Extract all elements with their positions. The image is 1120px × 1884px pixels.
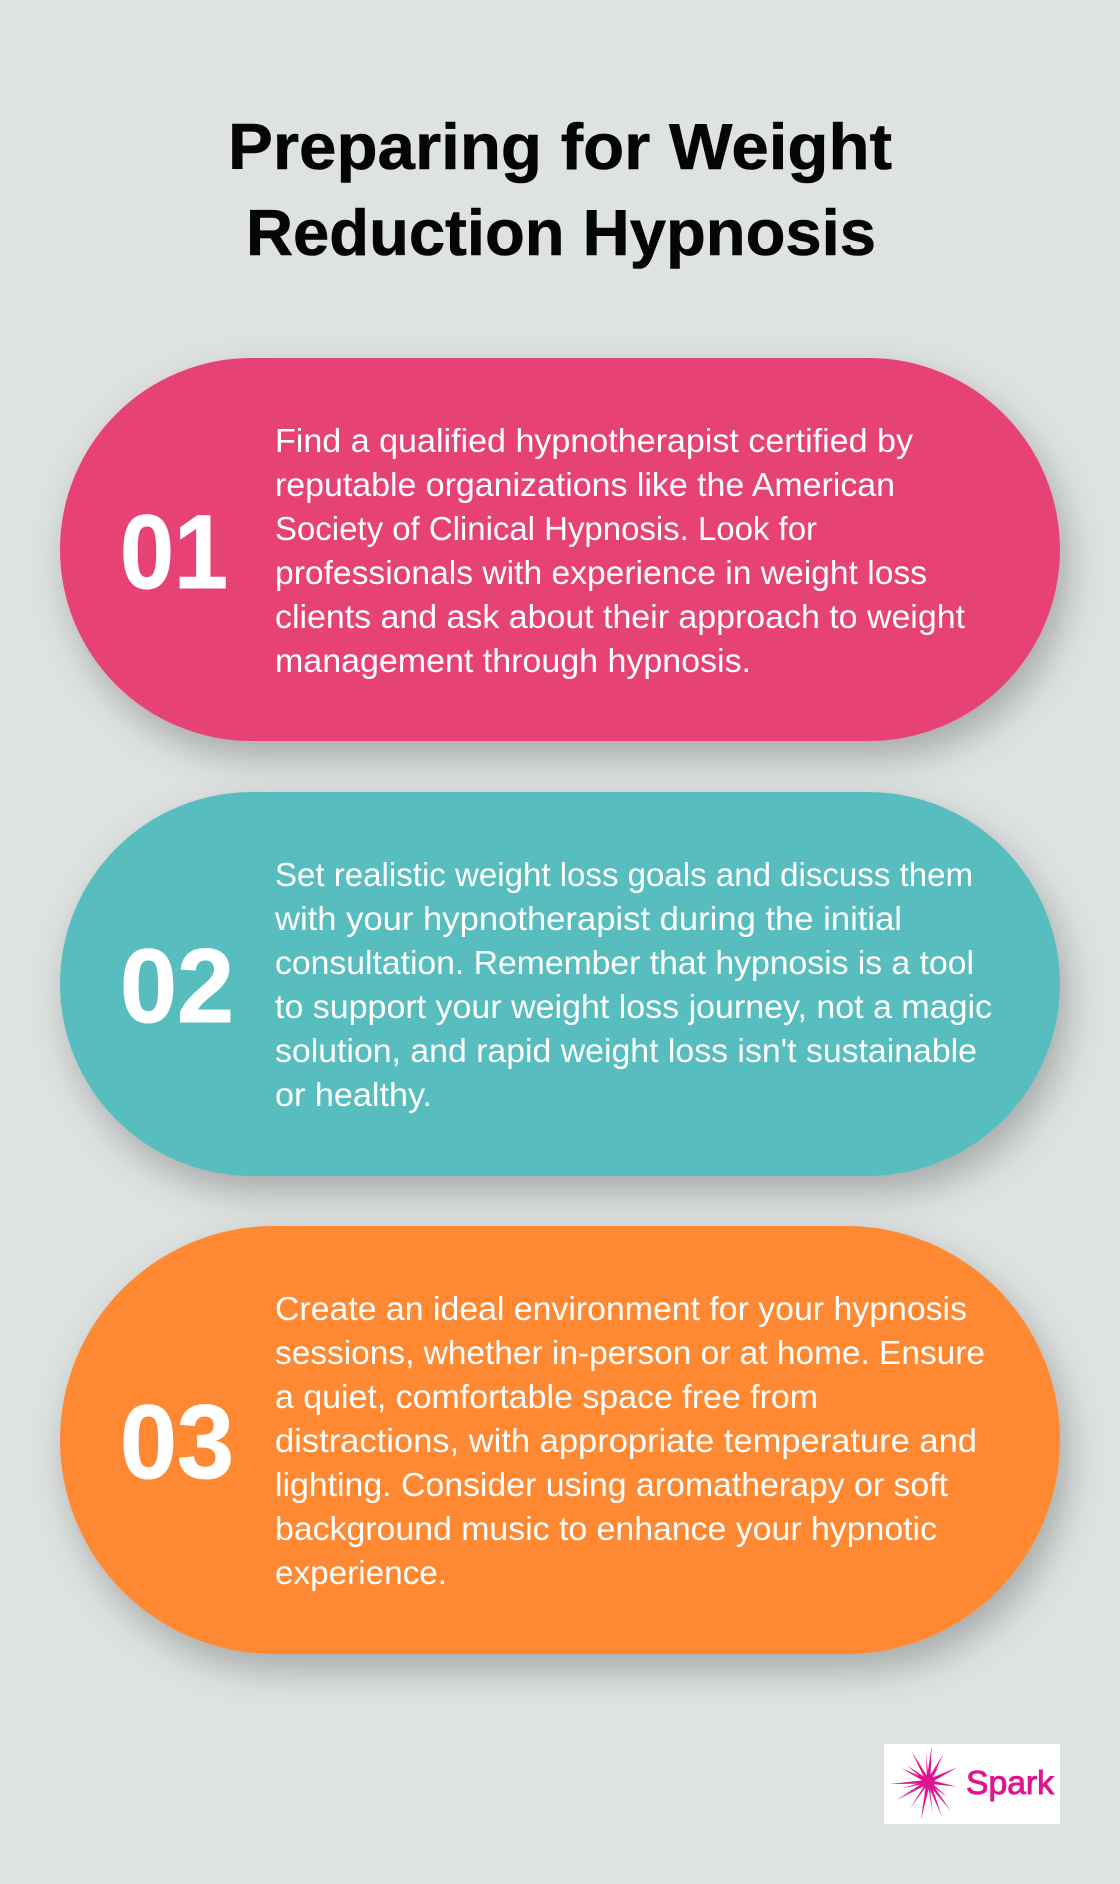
- logo wordmark: Spark: [966, 1764, 1054, 1801]
- text block 02: or healthy.: [275, 1076, 432, 1113]
- title: Reduction Hypnosis: [246, 196, 876, 269]
- text block 03: background music to enhance your hypnotic: [275, 1510, 937, 1547]
- pill background 01: [60, 358, 1060, 741]
- text block 02: consultation. Remember that hypnosis is a tool: [275, 944, 974, 981]
- panel: step 03: [60, 1226, 1060, 1654]
- text block 02: Set realistic weight loss goals and discuss them: [275, 856, 973, 893]
- pill background 03: [60, 1226, 1060, 1654]
- text block 01: Find a qualified hypnotherapist certified by: [275, 422, 914, 459]
- text block 01: clients and ask about their approach to weight: [275, 598, 965, 635]
- title: Preparing for Weight: [228, 110, 892, 183]
- text block 02: solution, and rapid weight loss isn't sustainable: [275, 1032, 977, 1069]
- title: [228, 110, 892, 269]
- number 02: 02: [120, 928, 234, 1045]
- text block 01: reputable organizations like the American: [275, 466, 895, 503]
- number 03: 03: [120, 1384, 234, 1501]
- text block 03: sessions, whether in-person or at home. Ensure: [275, 1334, 985, 1371]
- panel: step 01: [60, 358, 1060, 741]
- text block 03: Create an ideal environment for your hypnosis: [275, 1290, 967, 1327]
- number 01: 01: [120, 494, 228, 611]
- text block 02: to support your weight loss journey, not a magic: [275, 988, 992, 1025]
- logo: Spark: [884, 1744, 1060, 1824]
- text block 02: with your hypnotherapist during the initial: [274, 900, 902, 937]
- text block 03: distractions, with appropriate temperature and: [275, 1422, 977, 1459]
- pill background 02: [60, 792, 1060, 1176]
- text block 02: [274, 856, 992, 1113]
- text block 01: Society of Clinical Hypnosis. Look for: [275, 510, 817, 547]
- panel: step 02: [60, 792, 1060, 1176]
- text block 03: experience.: [275, 1554, 447, 1591]
- text block 01: management through hypnosis.: [275, 642, 751, 679]
- icon: starburst: [890, 1746, 957, 1820]
- text block 03: a quiet, comfortable space free from: [275, 1378, 818, 1415]
- text block 03: lighting. Consider using aromatherapy or soft: [275, 1466, 948, 1503]
- text block 01: [275, 422, 965, 679]
- text block 01: professionals with experience in weight loss: [275, 554, 927, 591]
- text block 03: [275, 1290, 985, 1591]
